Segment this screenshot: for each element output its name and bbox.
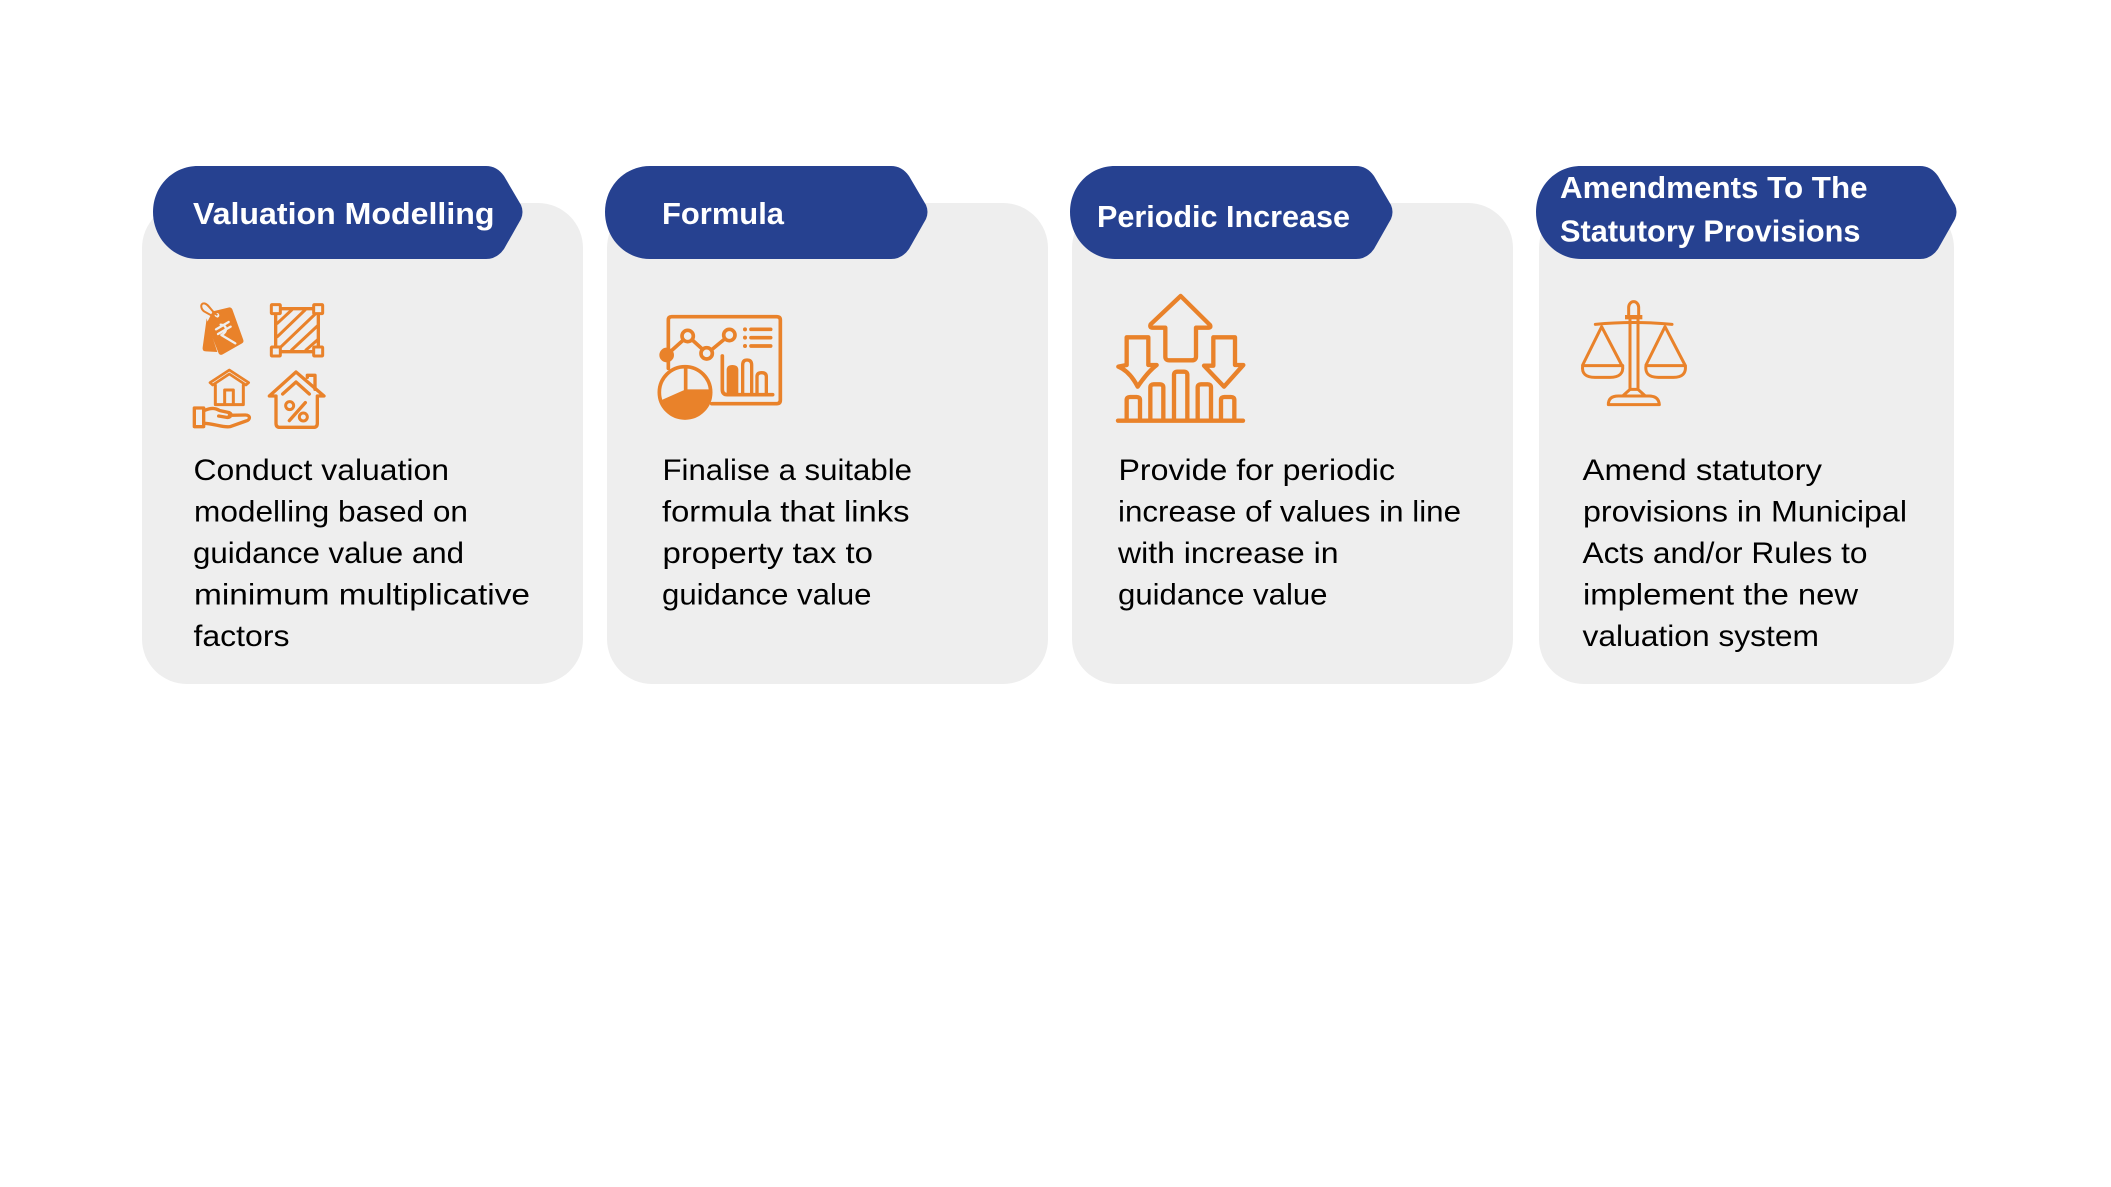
body text: Formula: guidance value (662, 578, 872, 612)
body text: Periodic Increase: Provide for periodic (1118, 454, 1395, 487)
icon: house with percent (269, 372, 324, 427)
card background 3 (1072, 203, 1513, 684)
card background 4 (1539, 203, 1954, 684)
body text: Formula: Finalise a suitable (662, 454, 912, 487)
header banner: Formula: Formula (662, 196, 785, 231)
body text: Formula: formula that links (662, 496, 910, 528)
body text: Valuation Modelling: Conduct valuation (194, 454, 449, 487)
body text: Amendments: Amend statutory (1582, 454, 1822, 487)
body text: Valuation Modelling: minimum multiplicative (194, 578, 530, 612)
body text: Valuation Modelling: modelling based on (194, 496, 468, 528)
header banner: Periodic Increase (1070, 166, 1392, 259)
body text: Periodic Increase: increase of values in line (1118, 496, 1461, 528)
panel: Periodic Increase (1070, 166, 1513, 684)
body text: Amendments: provisions in Municipal (1583, 496, 1907, 528)
icon: rupee price tag (201, 303, 243, 355)
icon: analytics dashboard (659, 317, 780, 419)
icon: balance scale (1582, 302, 1685, 405)
panel: Amendments To The Statutory Provisions (1536, 166, 1956, 684)
body text: Formula: property tax to (662, 537, 873, 570)
body text: Periodic Increase (1117, 454, 1461, 612)
body text: Valuation Modelling: factors (194, 620, 290, 653)
body text: Amendments (1582, 454, 1907, 653)
header banner: Periodic Increase: Periodic Increase (1097, 199, 1350, 234)
header banner: Amendments To The Statutory Provisions: Amendments To The (1560, 170, 1868, 205)
header banner: Amendments To The Statutory Provisions: Statutory Provisions (1560, 214, 1860, 248)
icon: house in hand (194, 370, 249, 427)
body text: Valuation Modelling: guidance value and (193, 537, 464, 570)
panel: Formula (605, 166, 1048, 684)
icon: arrows and bars (1118, 296, 1243, 421)
panel: Valuation Modelling (142, 166, 583, 684)
body text: Amendments: valuation system (1582, 620, 1819, 653)
header banner: Formula (605, 166, 928, 259)
icon: hatched plot (271, 305, 323, 356)
header banner: Valuation Modelling: Valuation Modelling (193, 196, 494, 231)
body text: Valuation Modelling (193, 454, 530, 653)
card background 2 (607, 203, 1048, 684)
body text: Formula (662, 454, 912, 612)
header banner: Valuation Modelling (153, 166, 522, 259)
card background 1 (142, 203, 583, 684)
body text: Amendments: Acts and/or Rules to (1582, 537, 1868, 570)
body text: Periodic Increase: with increase in (1117, 537, 1338, 570)
icon group: price tag, plot, house in hand, house percent (194, 303, 324, 427)
body text: Amendments: implement the new (1583, 578, 1858, 612)
header banner: Amendments To The Statutory Provisions (1536, 166, 1956, 259)
body text: Periodic Increase: guidance value (1118, 578, 1328, 612)
